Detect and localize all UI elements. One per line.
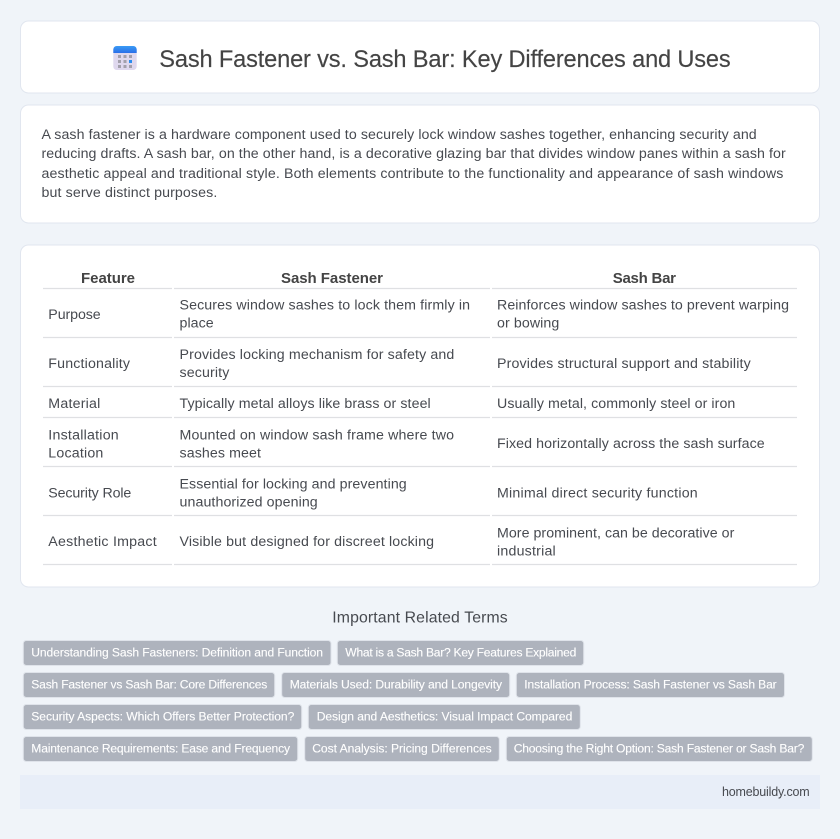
table header: Sash Bar — [613, 270, 676, 287]
row: purpose: place — [180, 316, 214, 332]
tag — [516, 672, 784, 698]
row: security role — [48, 476, 698, 510]
row: installation location: sashes meet — [180, 445, 261, 461]
row: installation location: Installation — [48, 427, 119, 443]
tag — [23, 640, 331, 666]
icon: calendar — [113, 46, 137, 70]
row: installation location: Fixed horizontally across the sash surface — [497, 436, 765, 452]
table header: Sash Fastener — [281, 270, 383, 287]
row: purpose: Purpose — [48, 307, 101, 323]
text block: introduction paragraph: reducing drafts. A sash bar, on the other hand, is a decorative glazing bar that divides window panes within a sash for — [42, 146, 786, 162]
row: aesthetic impact: industrial — [497, 543, 556, 559]
row: functionality: Provides structural support and stability — [497, 356, 752, 372]
tag — [305, 736, 499, 762]
row: security role: Minimal direct security function — [497, 485, 698, 501]
tag: Understanding Sash Fasteners: Definition and Function — [31, 646, 323, 660]
tag: Sash Fastener vs Sash Bar: Core Differences — [31, 678, 267, 692]
text block: introduction paragraph: aesthetic appeal and traditional style. Both elements contribute to the functionality and appearance of sash windows — [42, 166, 783, 182]
row: functionality: security — [180, 365, 230, 381]
title: Sash Fastener vs. Sash Bar: Key Differences and Uses — [159, 47, 731, 73]
footer — [20, 775, 820, 809]
tag — [308, 704, 580, 730]
tag: Design and Aesthetics: Visual Impact Compared — [317, 710, 572, 724]
tag — [23, 672, 275, 698]
row: installation location — [48, 427, 765, 461]
text block: introduction paragraph: but serve distinct purposes. — [42, 185, 217, 201]
tag — [337, 640, 584, 666]
heading: important related terms: Important Related Terms — [332, 610, 508, 627]
row: security role: Security Role — [48, 485, 131, 501]
row: purpose: Reinforces window sashes to prevent warping — [497, 298, 789, 314]
row: security role: Essential for locking and preventing — [180, 476, 407, 492]
row: material: Usually metal, commonly steel or iron — [497, 396, 735, 412]
row: aesthetic impact: More prominent, can be decorative or — [497, 525, 735, 541]
panel: title header — [20, 21, 820, 93]
tag: Security Aspects: Which Offers Better Protection? — [31, 710, 295, 724]
row: security role: unauthorized opening — [180, 494, 318, 510]
panel: related term tags — [23, 640, 812, 762]
tag: What is a Sash Bar? Key Features Explained — [345, 646, 576, 660]
row: purpose: or bowing — [497, 316, 559, 332]
text block: introduction paragraph — [42, 127, 786, 201]
panel: introduction — [20, 105, 820, 223]
tag: Cost Analysis: Pricing Differences — [312, 742, 492, 756]
tag — [506, 736, 812, 762]
row: purpose: Secures window sashes to lock them firmly in — [180, 298, 470, 314]
row: functionality: Provides locking mechanism for safety and — [180, 347, 454, 363]
row: material — [48, 396, 735, 412]
row: functionality — [48, 347, 752, 381]
row: aesthetic impact — [48, 525, 735, 559]
tag: Installation Process: Sash Fastener vs Sash Bar — [524, 678, 777, 692]
panel: comparison table — [20, 245, 820, 587]
table header: Feature — [81, 270, 135, 287]
row: purpose — [48, 298, 789, 332]
table header — [81, 270, 676, 287]
tag — [23, 704, 302, 730]
row: installation location: Location — [48, 445, 103, 461]
row: aesthetic impact: Visible but designed for discreet locking — [180, 534, 434, 550]
row: material: Typically metal alloys like brass or steel — [180, 396, 431, 412]
tag — [282, 672, 510, 698]
row: installation location: Mounted on window sash frame where two — [180, 427, 454, 443]
tag: Maintenance Requirements: Ease and Frequency — [31, 742, 291, 756]
row: functionality: Functionality — [48, 356, 131, 372]
row: material: Material — [48, 396, 100, 412]
footer source text: homebuildy.com — [722, 785, 810, 799]
tag: Choosing the Right Option: Sash Fastener or Sash Bar? — [514, 742, 805, 756]
tag — [23, 736, 298, 762]
tag: Materials Used: Durability and Longevity — [290, 678, 503, 692]
text block: introduction paragraph: A sash fastener is a hardware component used to securely lock window sashes together, enhancing security and — [42, 127, 757, 143]
row: aesthetic impact: Aesthetic Impact — [48, 534, 157, 550]
